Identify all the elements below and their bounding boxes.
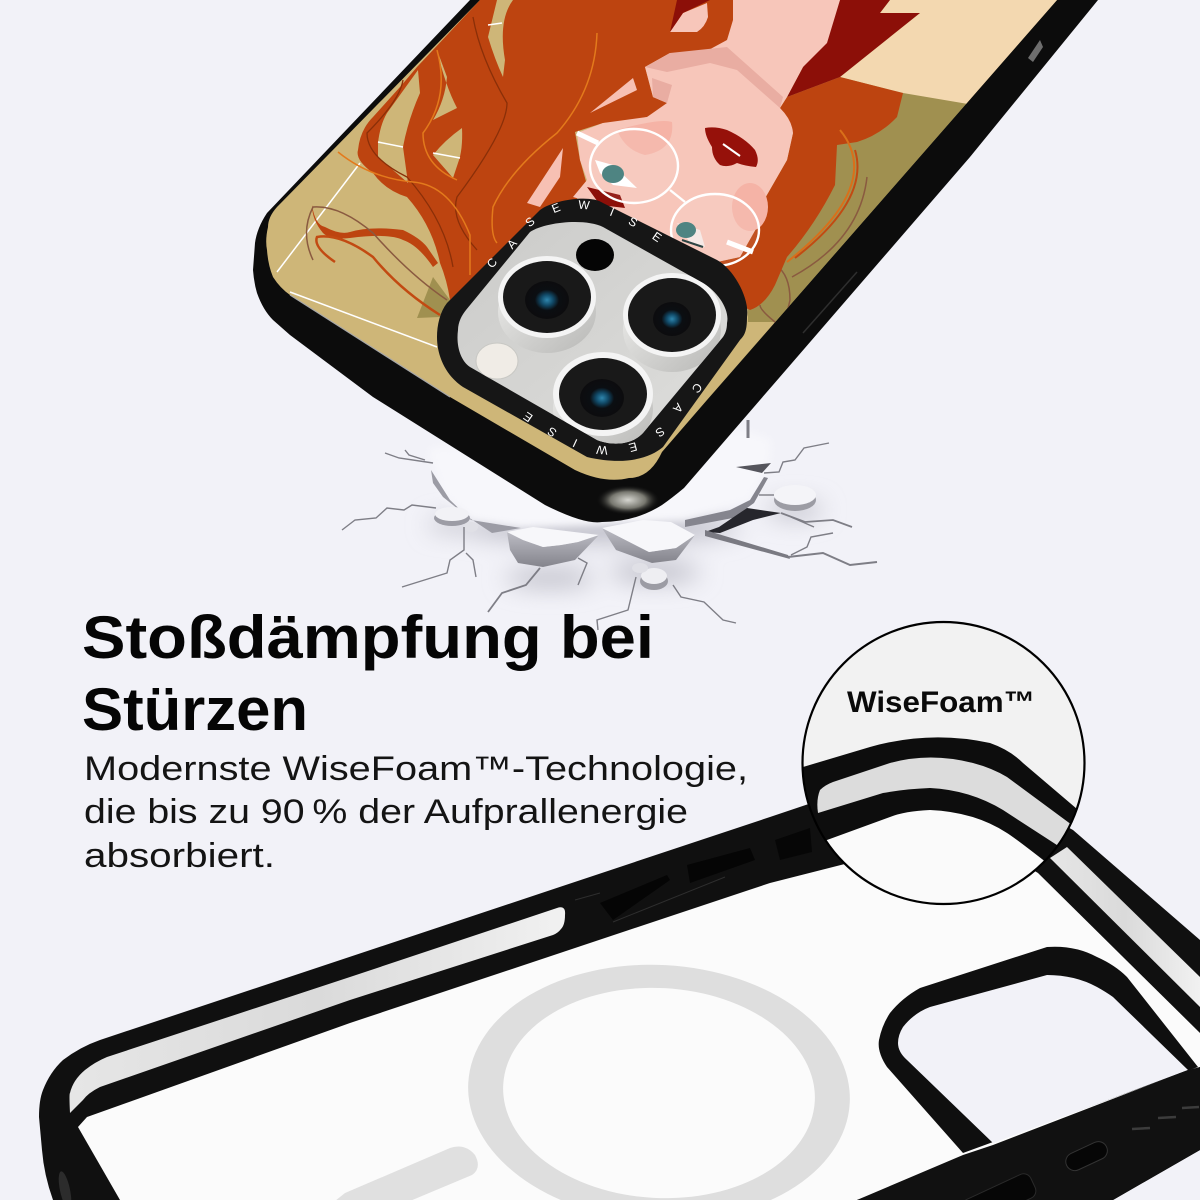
rock fragments: [434, 485, 816, 590]
magnified frame black: [790, 737, 1090, 880]
CASEWISE ring lettering top: S: [522, 214, 538, 230]
heading: Stoßdämpfung bei: [82, 604, 654, 671]
gold ground: [266, 0, 1057, 480]
right orange strands: [787, 130, 858, 262]
magnified glass: [790, 808, 1100, 915]
eye right: [676, 222, 705, 247]
CASEWISE ring lettering bottom: E: [627, 439, 639, 455]
side buttons: [575, 828, 812, 922]
fractured edge left: [431, 470, 521, 533]
magnified foam slot: [817, 758, 1072, 847]
callout label: WiseFoam™: [847, 686, 1035, 719]
cheek blush two: [732, 183, 768, 231]
CASEWISE ring lettering bottom: W: [595, 442, 608, 457]
CASEWISE ring lettering top: C: [484, 255, 500, 271]
clear phone case frame (bottom): [39, 770, 1200, 1200]
left side port: [56, 1170, 74, 1200]
background gaps in hair: [378, 0, 513, 183]
CASEWISE ring lettering bottom: E: [521, 409, 535, 425]
CASEWISE ring lettering bottom: S: [545, 424, 559, 440]
ear opening: [670, 3, 708, 32]
CASEWISE ring lettering top: [484, 198, 664, 271]
flash: [476, 343, 518, 379]
light broken plates: [429, 430, 771, 528]
hair left mass: [358, 0, 733, 300]
CASEWISE ring lettering bottom: A: [670, 400, 686, 416]
eye left: [595, 160, 637, 188]
callout disc: [802, 622, 1084, 904]
CASEWISE ring lettering top: E: [550, 200, 562, 216]
neck shadow: [645, 47, 783, 108]
side seam: [803, 272, 857, 333]
broken block left: [507, 527, 599, 567]
bottom ports: [960, 1139, 1110, 1200]
face and neck: [573, 0, 840, 262]
dark red ear shadow: [670, 0, 710, 32]
camera bump: [437, 198, 747, 461]
pale skin slivers in hair: [527, 78, 637, 207]
microphone hole: [576, 239, 614, 271]
side button highlight: [1028, 40, 1043, 62]
lips: [705, 127, 758, 167]
CASEWISE ring lettering top: W: [578, 198, 591, 213]
CASEWISE ring lettering bottom: S: [653, 424, 667, 440]
heading: Stürzen: [82, 676, 308, 743]
soft wall shadow: [428, 502, 823, 587]
CASEWISE ring lettering bottom: C: [689, 380, 705, 396]
dark red detail at chin: [587, 187, 625, 208]
CASEWISE ring lettering top: I: [608, 205, 616, 219]
hair right mass: [717, 77, 903, 310]
impact cracks in wall: [342, 420, 877, 630]
side slot right: [1050, 847, 1200, 1007]
impact glint: [596, 485, 660, 515]
body text: die bis zu 90 % der Aufprallenergie: [84, 793, 688, 831]
CASEWISE ring lettering bottom: I: [571, 436, 579, 450]
ribbed marks: [1132, 1107, 1199, 1129]
black case body: [253, 0, 1098, 522]
fractured edge right: [685, 477, 768, 527]
lens 2: [623, 273, 721, 372]
phone case with illustrated art (top): [250, 0, 1100, 522]
crack lines: [342, 420, 877, 630]
CASEWISE ring lettering top: S: [626, 214, 640, 230]
dark wedge: [736, 463, 771, 473]
black frame body: [39, 770, 1200, 1200]
wide crack wedge: [705, 530, 790, 559]
long hair strand: [312, 205, 438, 267]
CASEWISE ring lettering top: E: [650, 229, 664, 245]
gloss edge: [290, 295, 450, 397]
sand area: [840, 0, 1070, 104]
heading: [82, 604, 654, 743]
side slot left: [70, 907, 565, 1113]
olive triangle: [417, 277, 450, 318]
callout ring: [802, 622, 1084, 904]
olive floor: [748, 78, 971, 322]
MagSafe alignment pill: [335, 1147, 478, 1200]
CASEWISE ring lettering bottom: [521, 380, 705, 457]
bottom band edge: [857, 1067, 1200, 1200]
lens 3: [553, 352, 653, 451]
dark gap: [705, 508, 781, 533]
WiseFoam magnified callout: [790, 622, 1100, 915]
artwork panel: [266, 0, 1057, 480]
body text: absorbiert.: [84, 837, 275, 875]
hair shadow sliver on face: [652, 78, 672, 103]
lens 1: [498, 256, 596, 353]
CASEWISE ring lettering top: A: [504, 236, 520, 252]
small white lines over gaps: [378, 23, 502, 158]
glass back: [78, 845, 1200, 1200]
white court lines: [277, 163, 437, 347]
cheek blush one: [617, 121, 672, 155]
broken block right: [602, 520, 695, 563]
dark red collar: [787, 0, 920, 97]
fine hair lines: [367, 17, 507, 267]
camera window: [458, 222, 727, 444]
body text: Modernste WiseFoam™-Technologie,: [84, 750, 748, 788]
MagSafe ring: [462, 955, 856, 1200]
glasses: [577, 129, 759, 266]
body text: [84, 750, 748, 875]
camera cut-out: [879, 947, 1198, 1153]
